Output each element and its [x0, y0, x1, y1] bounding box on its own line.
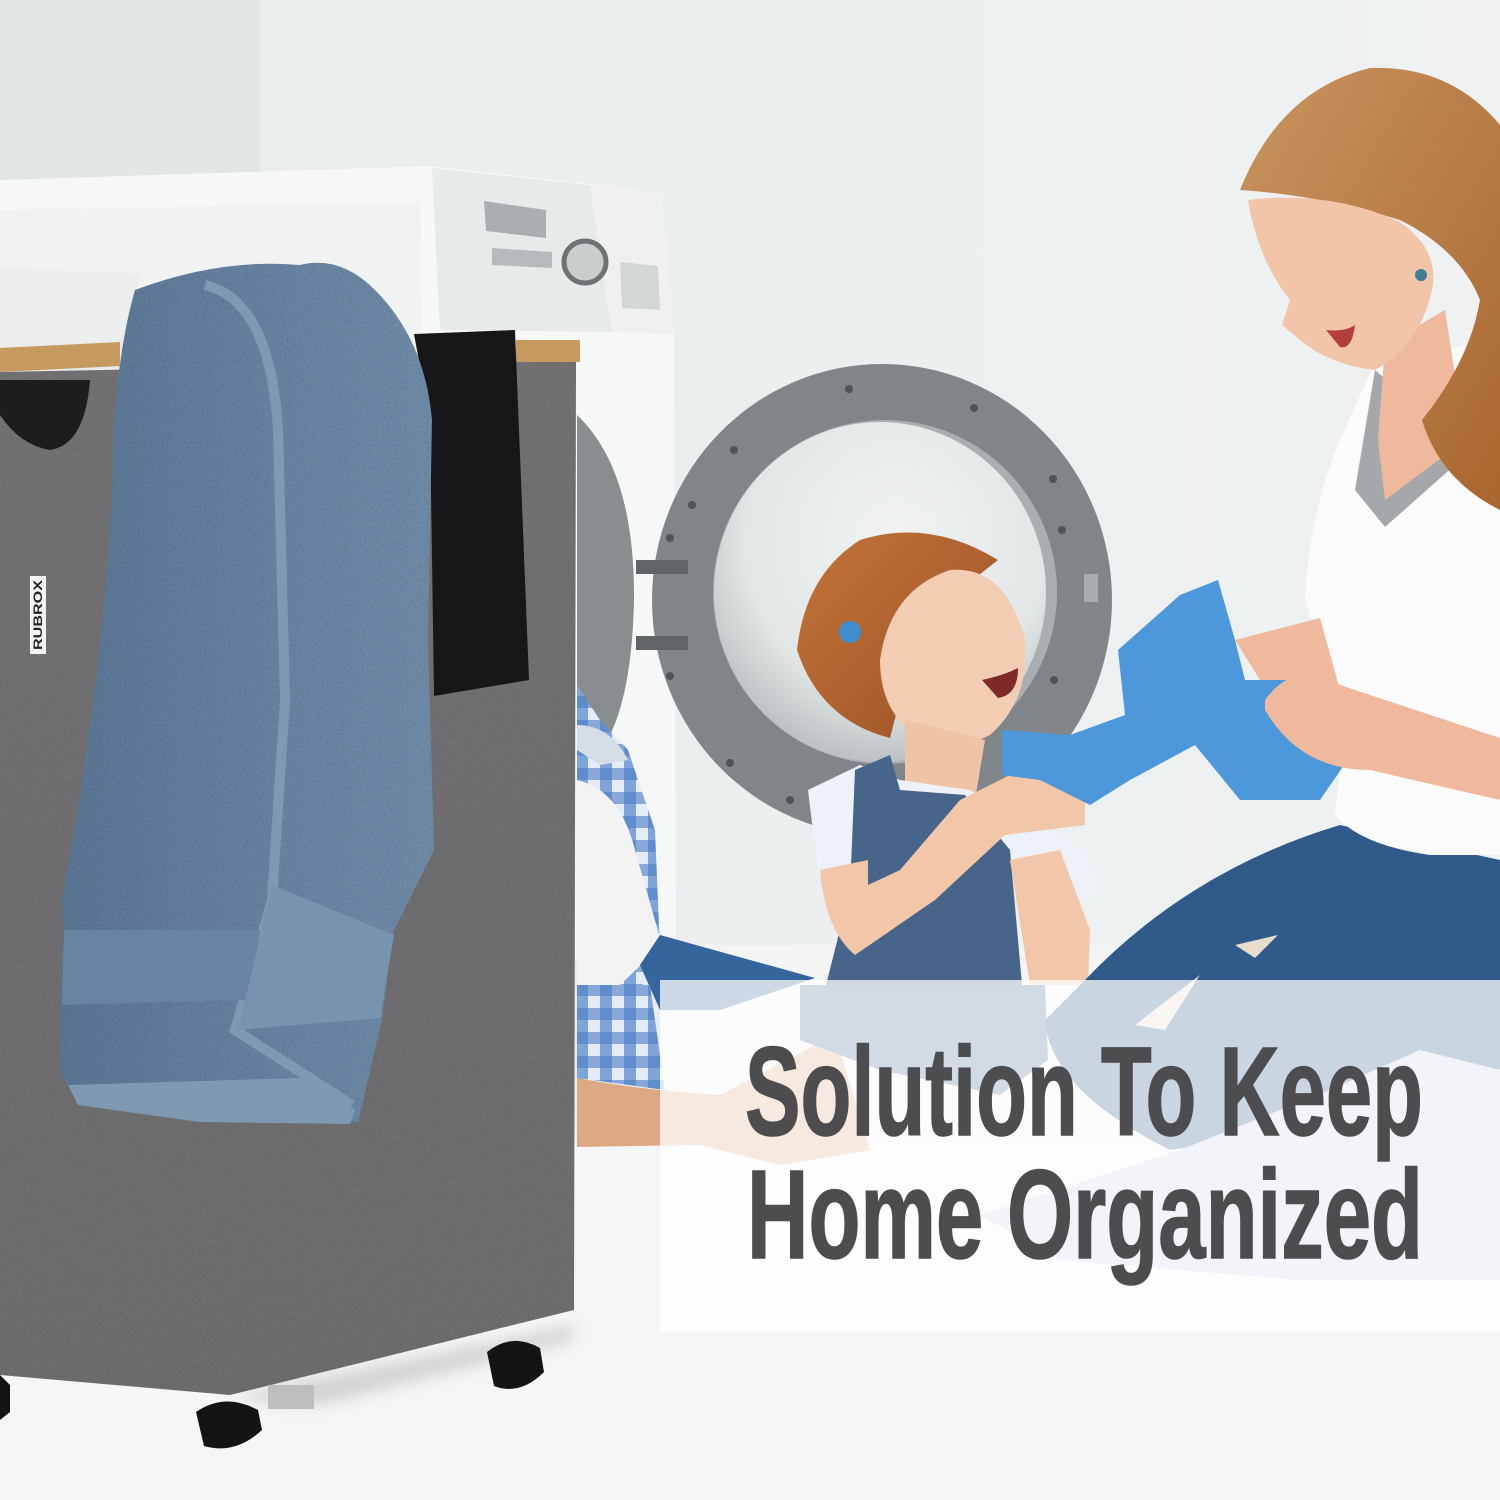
hamper body [0, 362, 576, 1395]
woman hair [1240, 68, 1500, 510]
woman neck [1378, 310, 1465, 500]
child shirt [808, 765, 1102, 905]
child neck [905, 720, 985, 800]
headline [745, 1021, 1423, 1285]
white basket on washer [0, 268, 140, 345]
floor garment [980, 1050, 1500, 1280]
child overalls leg seen through banner [800, 985, 1048, 1095]
black cloth [414, 330, 529, 696]
blue garment [1002, 580, 1375, 805]
translucent banner [660, 980, 1500, 1332]
child overalls [826, 755, 1022, 985]
bamboo rim [0, 340, 580, 372]
hamper [0, 330, 580, 1448]
hamper handle opening [0, 380, 90, 450]
floor [0, 945, 1500, 1500]
child hair [797, 532, 998, 738]
wheels [0, 1341, 544, 1448]
child face [880, 570, 1026, 745]
opening of drum [577, 415, 634, 735]
child arms [820, 770, 1085, 955]
woman jeans [1045, 825, 1500, 1150]
woman face [1248, 198, 1433, 370]
woman [1045, 68, 1500, 1150]
control dial [564, 241, 606, 283]
brand tag [30, 576, 46, 654]
woman far arm [1235, 618, 1340, 690]
blue towel [60, 263, 434, 1124]
detergent drawer handle [620, 262, 660, 310]
woman shirt [1305, 340, 1500, 855]
child [797, 532, 1102, 1095]
laundry pile [577, 685, 870, 1165]
woman near arm [1265, 676, 1500, 800]
control panel display [484, 201, 546, 238]
laundry door [636, 364, 1112, 836]
washing machine [0, 166, 676, 960]
brand tag: RUBROX [31, 580, 45, 650]
